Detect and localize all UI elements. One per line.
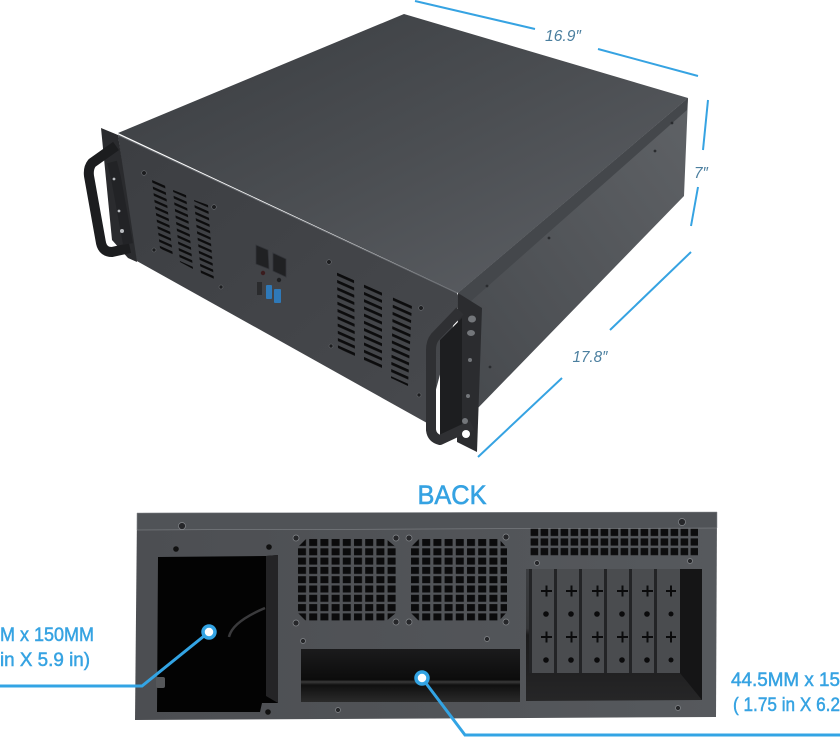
- back plate: [135, 512, 717, 720]
- expansion slot bay: [526, 569, 702, 701]
- heading: BACK: BACK: [418, 480, 486, 510]
- side panel screws: [486, 122, 673, 368]
- right side face: [458, 98, 688, 410]
- right mounting ear: [457, 293, 482, 452]
- front panel screws: [142, 171, 423, 397]
- USB ports: [257, 282, 281, 303]
- front panel top highlight: [118, 135, 457, 293]
- front panel: [118, 135, 460, 423]
- left mounting ear: [101, 128, 137, 262]
- callout: low-profile opening: 44.5MM x 15: [731, 670, 840, 691]
- top mesh vent: [530, 528, 698, 556]
- back panel screws: [178, 518, 692, 712]
- callout: low-profile opening: [416, 670, 840, 735]
- back panel mounting holes: [173, 544, 272, 715]
- callout: power supply opening: [0, 625, 215, 686]
- slot cross holes: [541, 586, 676, 642]
- side top lid strip: [458, 98, 688, 302]
- chassis, back panel: [135, 512, 717, 720]
- dimension: height 7 inches: [691, 100, 709, 226]
- left handle: [89, 146, 130, 252]
- callout: power supply opening: M x 150MM: [0, 625, 94, 646]
- slot round holes: [543, 611, 674, 663]
- chassis, perspective view: [89, 14, 688, 452]
- right vent slots: [337, 271, 412, 386]
- right handle: [431, 311, 476, 440]
- left vent slots: [152, 180, 214, 281]
- dimension: width 16.9 inches: [415, 1, 698, 76]
- dimension: depth 17.8 inches: 17.8″: [572, 349, 609, 366]
- callout: power supply opening: in X 5.9 in): [0, 650, 90, 671]
- top lid band: [137, 512, 717, 530]
- fan grille right: [410, 538, 507, 622]
- low-profile opening: [301, 649, 520, 702]
- power and reset switches: [256, 245, 286, 282]
- dimension: width 16.9 inches: 16.9″: [545, 28, 582, 45]
- power supply opening: [156, 555, 278, 712]
- top face: [118, 14, 688, 293]
- dimension: height 7 inches: 7″: [694, 165, 709, 182]
- dimension: depth 17.8 inches: [478, 252, 691, 457]
- fan grille left: [297, 538, 397, 622]
